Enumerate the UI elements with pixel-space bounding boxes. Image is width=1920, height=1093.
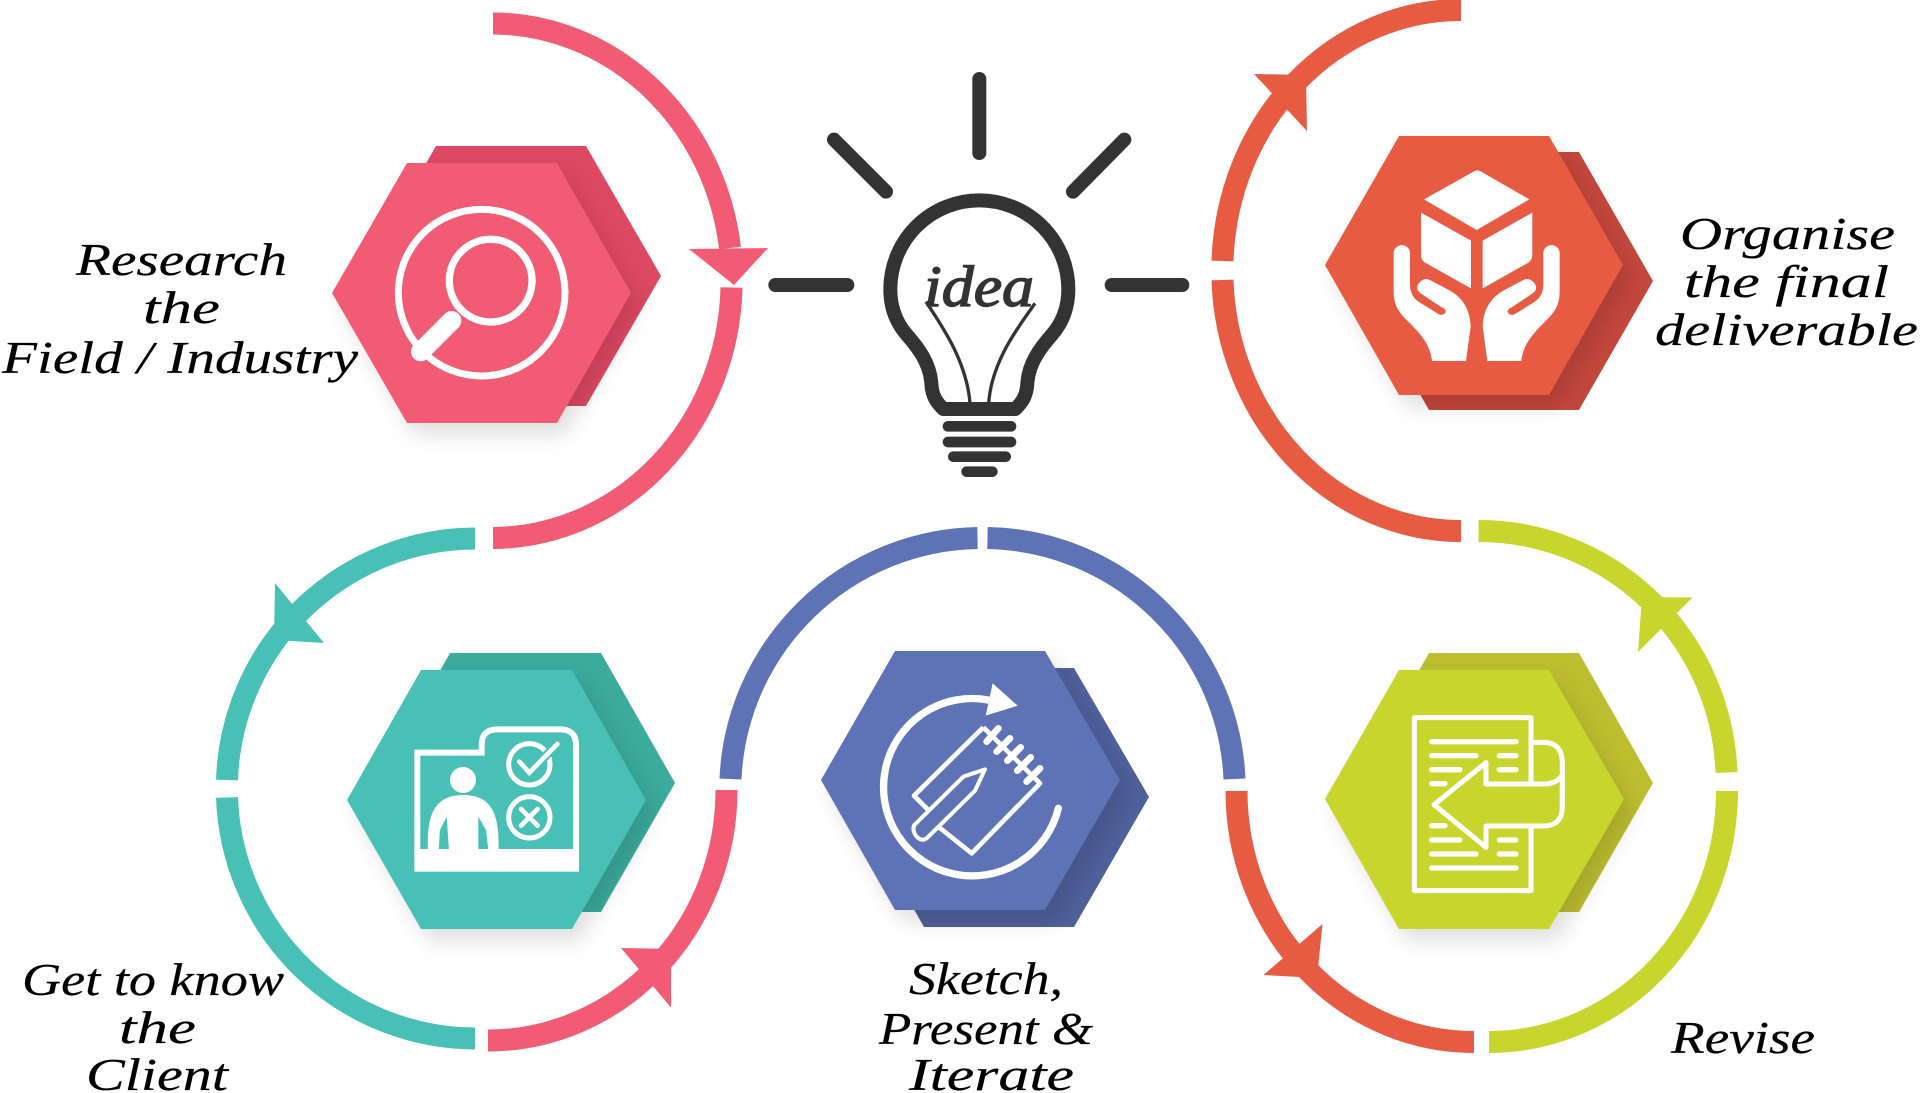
icon: notebook and pencil in cycle arrow (884, 683, 1058, 876)
arc: pink lower connector (488, 790, 726, 1040)
arc: teal client loop (227, 538, 475, 1038)
label: get to know the client: the (119, 1003, 196, 1053)
icon: idea light bulb: idea (924, 254, 1034, 319)
label: research the field: Research (75, 235, 287, 285)
icon: idea light bulb (775, 79, 1182, 477)
label: sketch present iterate (878, 954, 1093, 1093)
arc: orange lower connector (1236, 791, 1474, 1042)
arc: lime revise loop (1478, 531, 1727, 1042)
arc: pink research loop (493, 24, 768, 538)
panel: sketch hexagon (821, 651, 1149, 927)
icon: magnifying glass (398, 209, 565, 376)
label: organise the final deliverable (1655, 209, 1918, 355)
label: organise the final deliverable: deliverable (1655, 305, 1918, 355)
icon: document with return arrow (1414, 718, 1562, 891)
label: research the field: Field / Industry (1, 333, 358, 383)
label: research the field (1, 235, 358, 383)
arc: orange organise loop (1222, 10, 1461, 531)
label: get to know the client (22, 955, 284, 1093)
panel: client hexagon (347, 653, 675, 929)
icon: person with checklist (414, 729, 579, 872)
label: research the field: the (143, 283, 220, 333)
label: sketch present iterate: Sketch, (909, 954, 1063, 1004)
arc: blue sketch loop (730, 538, 1234, 779)
label: get to know the client: Get to know (22, 955, 284, 1005)
label: organise the final deliverable: Organise (1680, 209, 1895, 259)
panel: research hexagon (332, 146, 661, 423)
panel: revise hexagon (1325, 653, 1653, 929)
label: organise the final deliverable: the final (1684, 257, 1889, 307)
icon: hands holding box (1394, 170, 1560, 361)
label: sketch present iterate: Present & (878, 1004, 1093, 1054)
panel: organise hexagon (1325, 136, 1653, 410)
label: revise: Revise (1670, 1013, 1815, 1063)
